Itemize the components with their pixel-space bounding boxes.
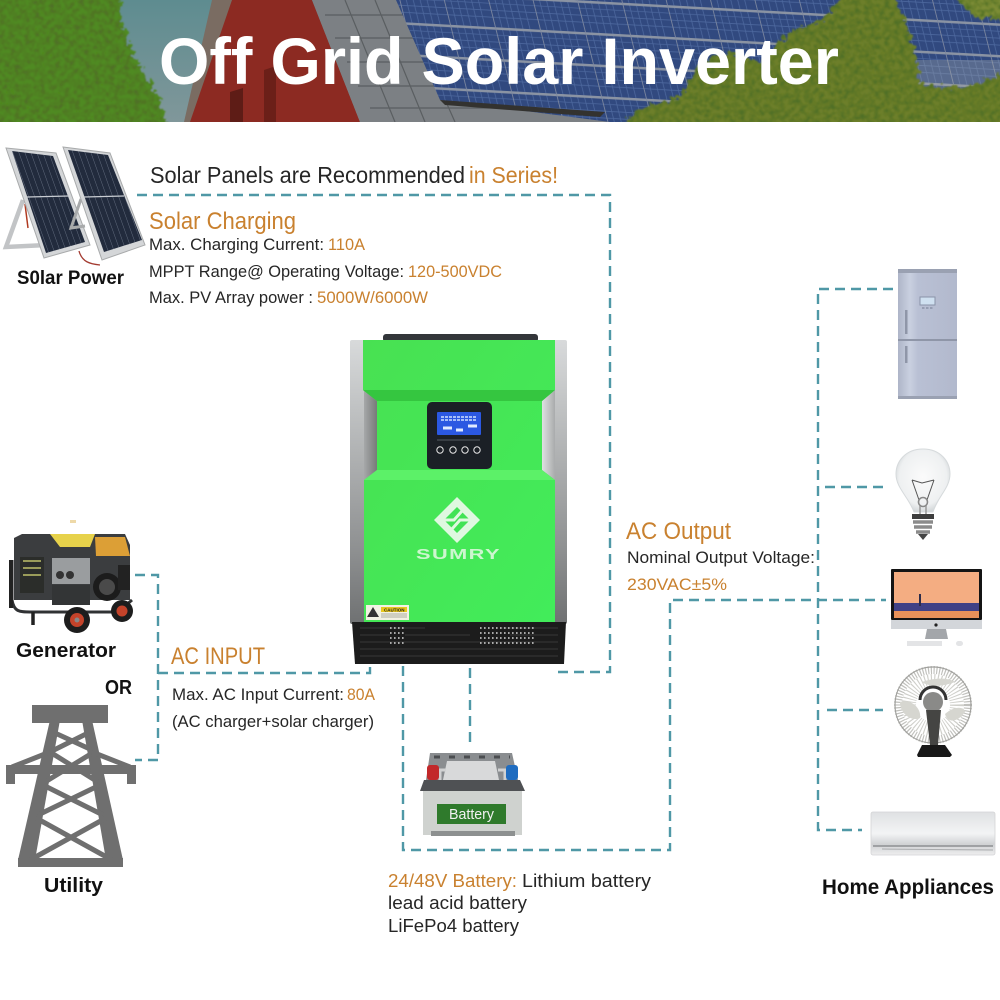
solar charging text block: 110A	[328, 235, 366, 254]
icon: battery: Battery	[449, 806, 494, 823]
caution label: CAUTION	[384, 608, 404, 612]
AC output text block	[626, 518, 815, 594]
AC output text block: AC Output	[626, 518, 731, 545]
label: utility: Utility	[44, 875, 104, 897]
house wall and gable	[184, 0, 360, 122]
solar charging text block: 5000W/6000W	[317, 288, 428, 307]
solar array on roof	[396, 0, 1000, 122]
AC output text block: 230VAC±5%	[627, 575, 727, 594]
label: solar power: S0lar Power	[17, 268, 125, 289]
battery text block: Lithium battery	[522, 871, 651, 891]
handle	[383, 334, 538, 342]
solar charging text block: Solar Charging	[149, 208, 296, 235]
recommendation heading: Solar Panels are Recommended	[150, 162, 465, 188]
icon: refrigerator	[898, 269, 957, 399]
solar charging text block: 120-500VDC	[408, 262, 502, 281]
battery text block: LiFePo4 battery	[388, 916, 519, 936]
control panel	[427, 402, 492, 469]
caution label	[366, 605, 409, 620]
icon: desktop monitor	[891, 569, 982, 646]
icon: air conditioner	[871, 812, 995, 855]
trees	[0, 0, 1000, 122]
AC input text block: (AC charger+solar charger)	[172, 712, 374, 731]
solar charging text block: Max. Charging Current:	[149, 235, 324, 254]
AC input text block: 80A	[347, 685, 376, 704]
battery text block: lead acid battery	[388, 893, 527, 913]
icon: generator	[11, 520, 133, 633]
grey roof tiles	[312, 0, 620, 122]
icon: light bulb	[896, 449, 950, 540]
AC input text block	[171, 643, 376, 731]
AC input text block: AC INPUT	[171, 643, 265, 670]
recessed sides	[364, 390, 555, 480]
icon: battery	[420, 753, 525, 836]
connection lines	[135, 195, 893, 850]
title: Off Grid Solar Inverter	[159, 24, 839, 98]
green body	[363, 340, 555, 622]
silver side rails	[350, 340, 567, 624]
brand name: SUMRY	[416, 546, 501, 563]
icon: desk fan	[895, 667, 971, 757]
header photo banner	[0, 0, 1000, 122]
label: or: OR	[105, 677, 133, 699]
logo mark	[434, 497, 480, 543]
vented base	[352, 622, 566, 664]
AC input text block: Max. AC Input Current:	[172, 685, 344, 704]
icon: utility pylon	[6, 705, 136, 867]
label: home appliances: Home Appliances	[822, 876, 994, 899]
solar charging text block: MPPT Range@ Operating Voltage:	[149, 262, 404, 281]
solar charging text block: Max. PV Array power :	[149, 288, 313, 307]
label: generator: Generator	[16, 640, 116, 662]
AC output text block: Nominal Output Voltage:	[627, 548, 815, 567]
battery text block	[388, 871, 651, 936]
battery text block: 24/48V Battery:	[388, 871, 517, 891]
recommendation heading: in Series!	[469, 162, 558, 188]
solar charging text block	[149, 208, 502, 307]
inverter unit	[350, 334, 567, 664]
icon: solar panels	[6, 147, 145, 265]
